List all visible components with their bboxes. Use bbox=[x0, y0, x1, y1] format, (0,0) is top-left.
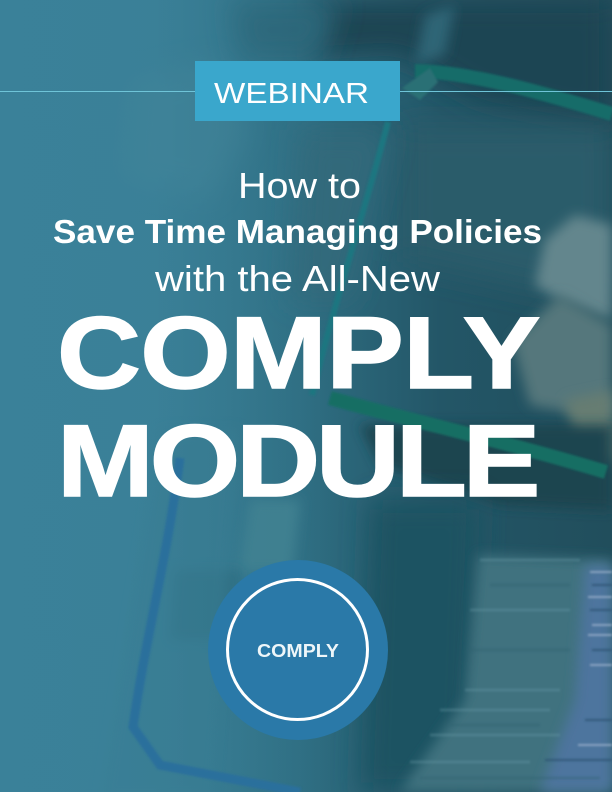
green binder cord upper bbox=[415, 71, 612, 114]
comply module badge: COMPLY bbox=[257, 641, 339, 661]
webinar badge: WEBINAR bbox=[214, 78, 369, 110]
horizontal rule bbox=[0, 91, 612, 92]
subtitle bbox=[53, 165, 542, 299]
main title bbox=[57, 297, 540, 518]
pale papers at right bbox=[535, 215, 612, 320]
main title: MODULE bbox=[57, 405, 540, 518]
subtitle: How to bbox=[238, 165, 361, 206]
teal binder cord diagonal bbox=[312, 122, 388, 395]
dark upper right folder shadow bbox=[310, 0, 612, 125]
stacked paper edges at lower right bbox=[400, 555, 612, 792]
webinar badge bbox=[195, 61, 400, 121]
comply module badge bbox=[208, 560, 388, 740]
subtitle: with the All-New bbox=[154, 258, 441, 299]
green binder cord lower bbox=[330, 398, 606, 472]
main title: COMPLY bbox=[57, 297, 540, 410]
blurred folder shapes in the middle bbox=[238, 500, 300, 572]
blue binder cord bbox=[133, 458, 300, 792]
dark band below module title bbox=[360, 425, 612, 510]
subtitle: Save Time Managing Policies bbox=[53, 213, 542, 250]
